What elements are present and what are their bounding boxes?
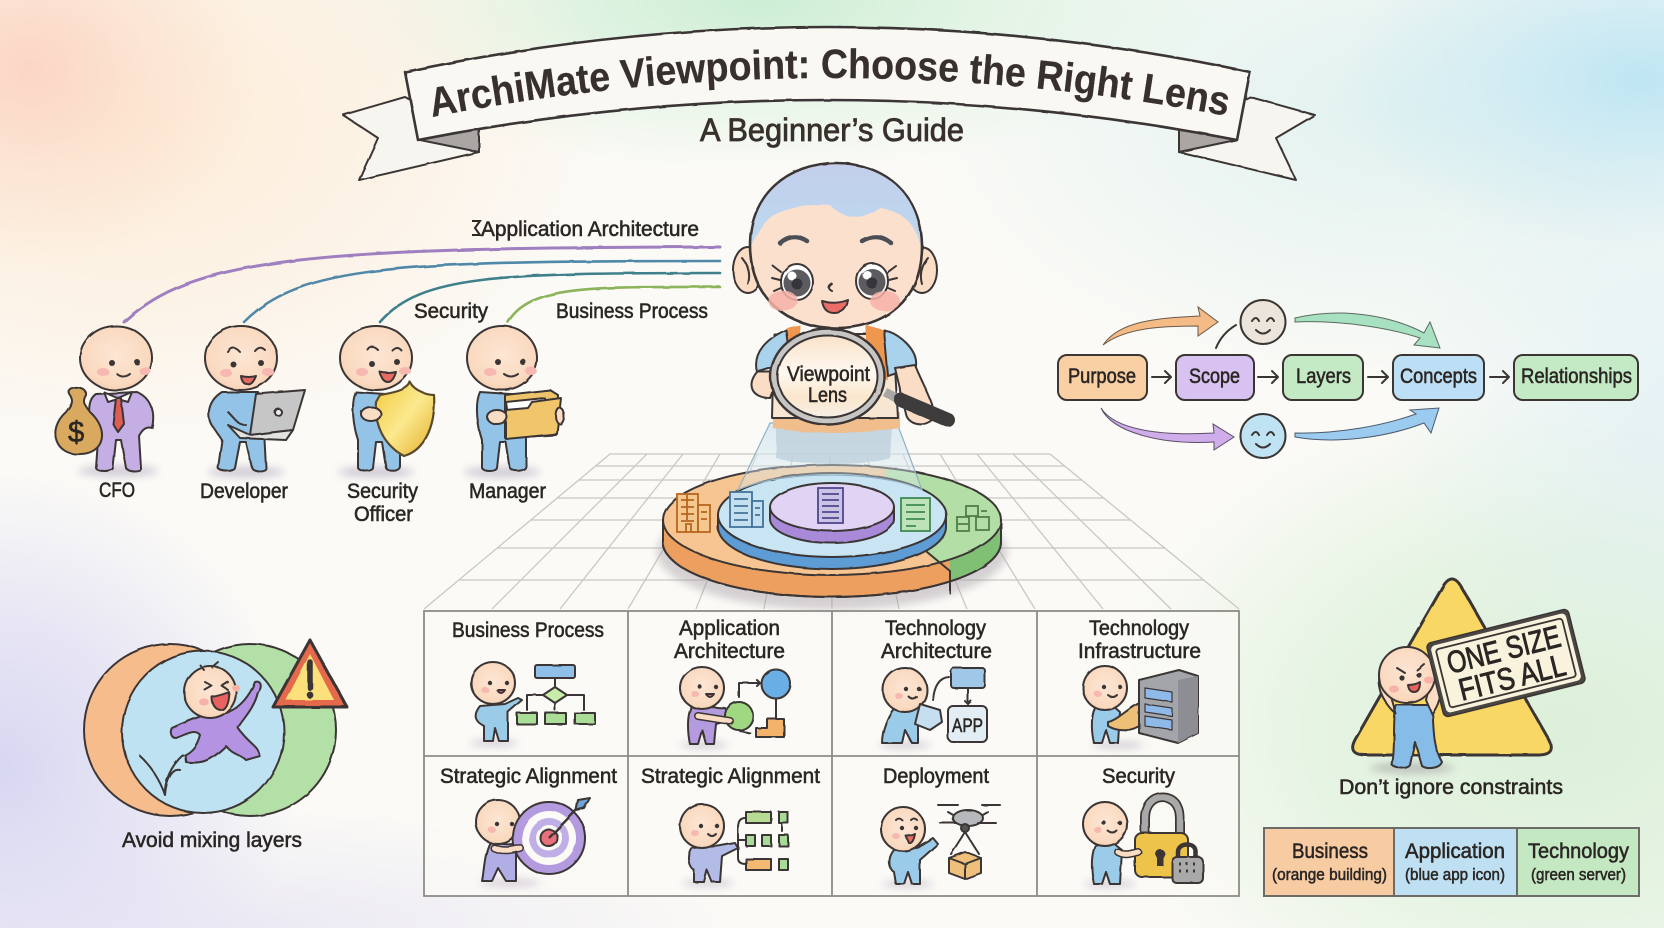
persona: CFO: $: [68, 416, 85, 449]
cell: security: [1083, 765, 1203, 888]
cell: strategic alignment, chart: Strategic Alignment: [641, 765, 820, 788]
cell: technology architecture: Technology: [885, 617, 986, 640]
persona label: Security Officer: [347, 480, 418, 526]
mascot legs, faded through the lens beam: [776, 425, 892, 464]
persona label: Security Officer: Security: [347, 480, 418, 503]
banner tails: [343, 27, 1315, 180]
legend: application: Application: [1405, 840, 1505, 863]
selection flow: [1058, 300, 1638, 458]
pitfall: avoid mixing layers: [84, 640, 347, 852]
cell: technology infrastructure: Infrastructure: [1078, 640, 1201, 663]
cell: application architecture: [674, 617, 790, 749]
connector label: security: Security: [414, 300, 488, 323]
step: Relationships: [1514, 355, 1638, 400]
disc: application layer (blue): [718, 473, 946, 569]
cell: strategic alignment, chart: [641, 765, 820, 887]
cell: deployment: [881, 765, 1000, 888]
cell: application architecture: Architecture: [674, 640, 785, 663]
step: Scope: Scope: [1189, 365, 1240, 388]
sign: one size fits all: [1426, 608, 1586, 718]
lens label: Viewpoint: [787, 363, 870, 386]
grid floor: [424, 454, 1239, 609]
cell: application architecture: Application: [679, 617, 780, 640]
legend: business: [1264, 828, 1394, 896]
legend: technology: Technology: [1528, 840, 1629, 863]
mascot straps: [784, 325, 888, 380]
persona: CFO: [55, 326, 158, 477]
cell: technology architecture: APP: [952, 716, 983, 737]
pitfall: one size fits all: [1339, 579, 1586, 799]
shouting figure: [1370, 647, 1454, 774]
mascot eyes: [772, 266, 897, 291]
curved arrow: green: [1295, 313, 1440, 348]
viewpoint table: [424, 611, 1239, 896]
label: avoid mixing layers: Avoid mixing layers: [122, 829, 302, 852]
connector label: business process: Business Process: [556, 300, 708, 323]
step: Layers: [1283, 355, 1363, 400]
cell: business process: Business Process: [452, 619, 604, 642]
icon: purple server: [818, 488, 843, 523]
mascot head: [750, 163, 922, 328]
table frame: [424, 611, 1239, 896]
arrow: step: [1152, 371, 1171, 383]
cell: strategic alignment, target: Strategic Alignment: [440, 765, 617, 788]
persona label: Developer: Developer: [200, 480, 288, 503]
lens handle: [885, 392, 900, 400]
face: blue smile: [1240, 414, 1286, 458]
connector label: application architecture: Application Architecture: [481, 218, 699, 241]
cell: technology architecture: Architecture: [881, 640, 992, 663]
legend: application: [1394, 828, 1517, 896]
cell: technology architecture: [879, 617, 992, 749]
mascot ears: [733, 247, 763, 293]
step: Scope: [1176, 355, 1254, 400]
legend: business: (orange building): [1272, 865, 1387, 884]
arrow: step: [1258, 371, 1278, 383]
curved arrow: blue: [1295, 408, 1439, 440]
disc: strategy layer (purple): [770, 483, 894, 543]
lens beam: [738, 423, 922, 490]
label: don't ignore constraints: Don’t ignore constraints: [1339, 776, 1563, 799]
arrow: step: [1490, 371, 1509, 383]
persona label: CFO: CFO: [99, 479, 135, 502]
sign: one size fits all: FITS ALL: [1455, 647, 1569, 708]
mascot cheeks: [768, 291, 798, 311]
warning triangle: [273, 640, 347, 707]
persona: Developer: [205, 326, 305, 478]
curved arrow: purple: [1101, 408, 1234, 450]
legend: business: Business: [1292, 840, 1368, 863]
mascot torso: [772, 334, 898, 418]
persona label: Manager: Manager: [469, 480, 546, 503]
yellow warning triangle: [1353, 579, 1551, 755]
persona: Manager: [464, 326, 564, 478]
lens label: [787, 363, 870, 407]
cell: strategic alignment, target: [440, 765, 617, 887]
step: Purpose: Purpose: [1068, 365, 1136, 388]
layered disc diagram: [657, 455, 1010, 610]
persona: Security Officer: [338, 326, 434, 478]
sign: one size fits all: ONE SIZE: [1443, 619, 1564, 681]
icon: blue building: [730, 492, 763, 527]
cell: deployment: Deployment: [883, 765, 989, 788]
lens label: Lens: [808, 384, 847, 407]
mascot brows: [780, 237, 891, 243]
step: Relationships: Relationships: [1521, 365, 1632, 388]
jumping baby: [140, 662, 261, 795]
arrow: step: [1368, 371, 1388, 383]
cell: technology infrastructure: [1078, 617, 1201, 749]
legend: technology: [1517, 828, 1639, 896]
curved arrow: orange: [1103, 307, 1218, 345]
persona label: Security Officer: Officer: [354, 503, 413, 526]
legend: application: (blue app icon): [1405, 865, 1505, 884]
icon: green cubes: [957, 506, 989, 531]
mascot hair: [751, 164, 920, 245]
title: ArchiMate Viewpoint: Choose the Right Lens: [432, 48, 1228, 117]
legend: [1264, 828, 1639, 896]
mascot with viewpoint lens: [733, 163, 948, 464]
mascot nose and mouth: [829, 284, 832, 291]
thin arc from scope: [1216, 325, 1236, 348]
legend: technology: (green server): [1531, 865, 1626, 884]
step: Concepts: Concepts: [1400, 365, 1477, 388]
lens glass: [770, 328, 884, 424]
step: Purpose: [1058, 355, 1147, 400]
cell: technology infrastructure: Technology: [1089, 617, 1189, 640]
cell: security: Security: [1102, 765, 1175, 788]
step: Concepts: [1393, 355, 1484, 400]
mascot belt: [773, 412, 900, 433]
subtitle: A Beginner’s Guide: [700, 112, 964, 148]
illustration: overlapping layer circles: [84, 640, 347, 816]
face: neutral smile: [1240, 300, 1286, 344]
mascot arms: [751, 372, 780, 398]
icon: orange building: [677, 494, 710, 532]
disc: business layer (orange) with technology wedge (green): [663, 455, 1010, 600]
cell: business process: [452, 619, 604, 747]
title banner: [342, 25, 1316, 181]
viewpoint connector lines: [124, 247, 720, 322]
icon: green document: [901, 498, 930, 531]
step: Layers: Layers: [1296, 365, 1351, 388]
